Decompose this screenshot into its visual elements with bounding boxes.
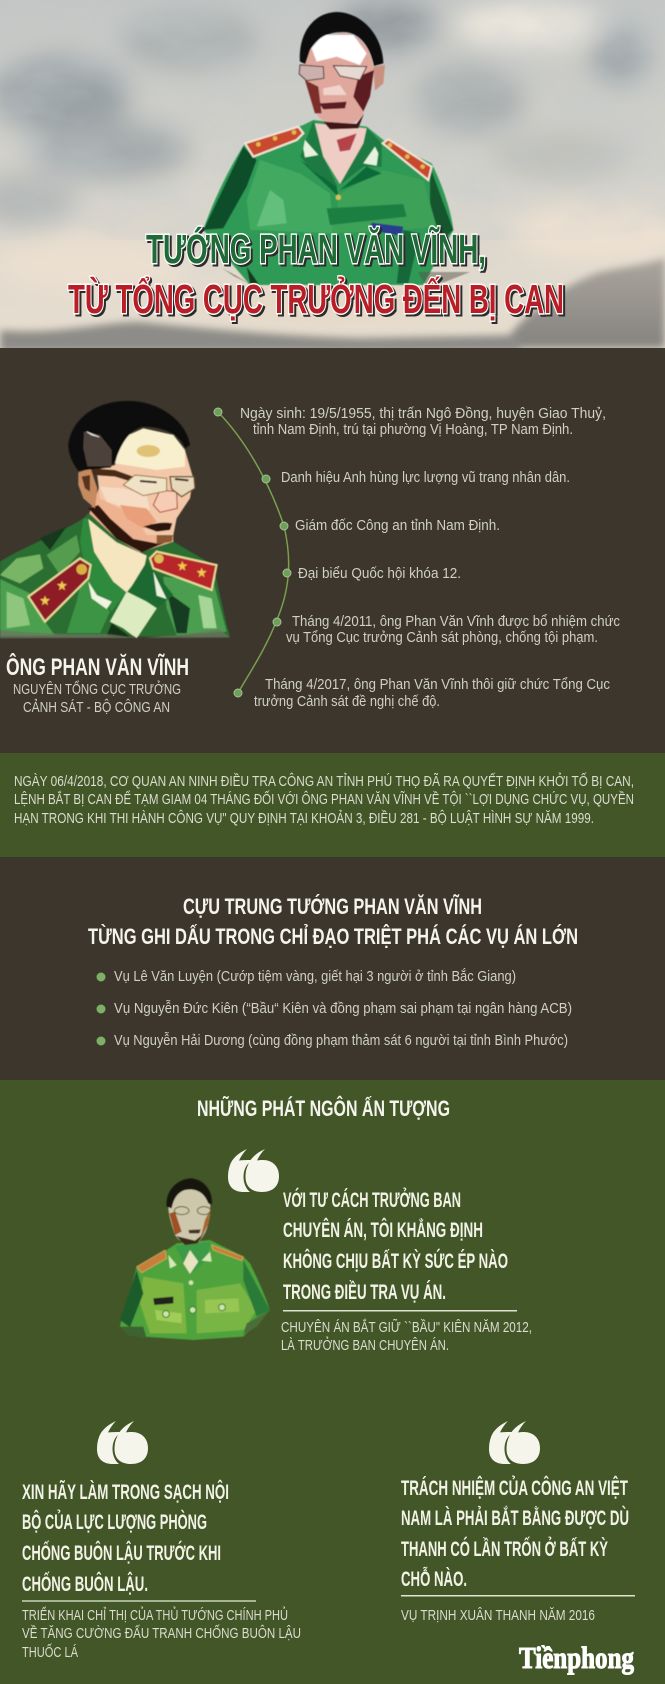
case 1: Vụ Lê Văn Luyện (Cướp tiệm vàng, giết hại 3 người ở tỉnh Bắc Giang)	[114, 968, 516, 985]
timeline text: 2017	[254, 676, 610, 710]
quote 2 text: XIN HÃY LÀM TRONG SẠCH NỘI	[22, 1480, 229, 1504]
quote 1 source: LÀ TRƯỞNG BAN CHUYÊN ÁN.	[281, 1336, 449, 1354]
timeline text: director: Giám đốc Công an tỉnh Nam Định.	[295, 517, 500, 534]
portrait: general in green uniform	[203, 12, 453, 285]
panel: quotes	[0, 1080, 665, 1684]
portrait: small figure	[120, 1178, 270, 1340]
quote 1 text: KHÔNG CHỊU BẤT KỲ SỨC ÉP NÀO	[283, 1249, 508, 1273]
portrait: Phan Văn Vĩnh	[0, 401, 230, 639]
timeline text: deputy: Đại biểu Quốc hội khóa 12.	[298, 565, 461, 582]
quote 2 source	[22, 1606, 301, 1661]
panel: biography	[0, 348, 665, 753]
title line 1: TƯỚNG PHAN VĂN VĨNH,	[146, 226, 486, 272]
panel: major cases	[0, 857, 665, 1080]
timeline text: birth: tỉnh Nam Định, trú tại phường Vị Hoàng, TP Nam Định.	[253, 421, 573, 438]
person role	[13, 680, 181, 716]
timeline text: 2011	[286, 613, 620, 646]
quote 3 source: VỤ TRỊNH XUÂN THANH NĂM 2016	[401, 1607, 595, 1624]
logo: Tiền Phong: Tiềnphong	[519, 1640, 634, 1675]
notice text	[14, 772, 634, 827]
quote 2 text	[22, 1480, 229, 1596]
quote 1 text: CHUYÊN ÁN, TÔI KHẲNG ĐỊNH	[283, 1218, 483, 1242]
person role: NGUYÊN TỔNG CỤC TRƯỞNG	[13, 680, 181, 698]
icon: quote mark 1	[228, 1149, 279, 1192]
quote 2 source: VỀ TĂNG CƯỜNG ĐẤU TRANH CHỐNG BUÔN LẬU	[22, 1624, 301, 1642]
timeline text: birth: Ngày sinh: 19/5/1955, thị trấn Ngô Đồng, huyện Giao Thuỷ,	[240, 405, 606, 422]
timeline curve	[214, 408, 291, 697]
quote 1 source: CHUYÊN ÁN BẮT GIỮ ``BẦU" KIÊN NĂM 2012,	[281, 1318, 532, 1336]
cloudy sky background	[0, 0, 665, 286]
panel: header banner	[0, 0, 665, 352]
quote 1 text	[283, 1188, 508, 1304]
person role: CẢNH SÁT - BỘ CÔNG AN	[23, 699, 170, 716]
case 3: Vụ Nguyễn Hải Dương (cùng đồng phạm thảm sát 6 người tại tỉnh Bình Phước)	[114, 1032, 568, 1049]
quote 2 source: TRIỂN KHAI CHỈ THỊ CỦA THỦ TƯỚNG CHÍNH PHỦ	[22, 1606, 288, 1624]
timeline text: birth	[240, 405, 606, 438]
quote 2 source: THUỐC LÁ	[22, 1643, 78, 1661]
quote 2 text: CHỐNG BUÔN LẬU TRƯỚC KHI	[22, 1541, 221, 1565]
quotes heading: NHỮNG PHÁT NGÔN ẤN TƯỢNG	[197, 1096, 450, 1121]
quote 1 text: TRONG ĐIỀU TRA VỤ ÁN.	[283, 1281, 446, 1304]
quote 3 text: CHỖ NÀO.	[401, 1567, 467, 1591]
timeline text: title: Danh hiệu Anh hùng lực lượng vũ trang nhân dân.	[281, 469, 570, 486]
quote 1 source	[281, 1318, 532, 1354]
mountains	[0, 258, 665, 352]
person name: ÔNG PHAN VĂN VĨNH	[6, 653, 189, 681]
cases heading	[88, 894, 578, 949]
timeline text: 2011: Tháng 4/2011, ông Phan Văn Vĩnh được bổ nhiệm chức	[292, 613, 620, 630]
quote 2 text: BỘ CỦA LỰC LƯỢNG PHÒNG	[22, 1510, 207, 1534]
timeline text: 2017: trưởng Cảnh sát đề nghị chế độ.	[254, 693, 440, 710]
title	[68, 226, 564, 322]
timeline text: 2011: vụ Tổng Cục trưởng Cảnh sát phòng, chống tội phạm.	[286, 629, 598, 646]
timeline text: 2017: Tháng 4/2017, ông Phan Văn Vĩnh thôi giữ chức Tổng Cục	[265, 676, 610, 693]
quote 3 text	[401, 1476, 629, 1591]
icon: quote mark 2	[97, 1421, 148, 1464]
panel: prosecution notice	[0, 753, 665, 857]
timeline dots	[214, 408, 291, 697]
icon: quote mark 3	[489, 1421, 540, 1464]
cases heading: CỰU TRUNG TƯỚNG PHAN VĂN VĨNH	[183, 894, 482, 919]
quote 1 text: VỚI TƯ CÁCH TRƯỞNG BAN	[283, 1188, 461, 1212]
torn edges of the uniform	[222, 268, 470, 285]
quote 2 text: CHỐNG BUÔN LẬU.	[22, 1572, 148, 1596]
case 2: Vụ Nguyễn Đức Kiên (“Bầu“ Kiên và đồng phạm sai phạm tại ngân hàng ACB)	[114, 1000, 572, 1017]
